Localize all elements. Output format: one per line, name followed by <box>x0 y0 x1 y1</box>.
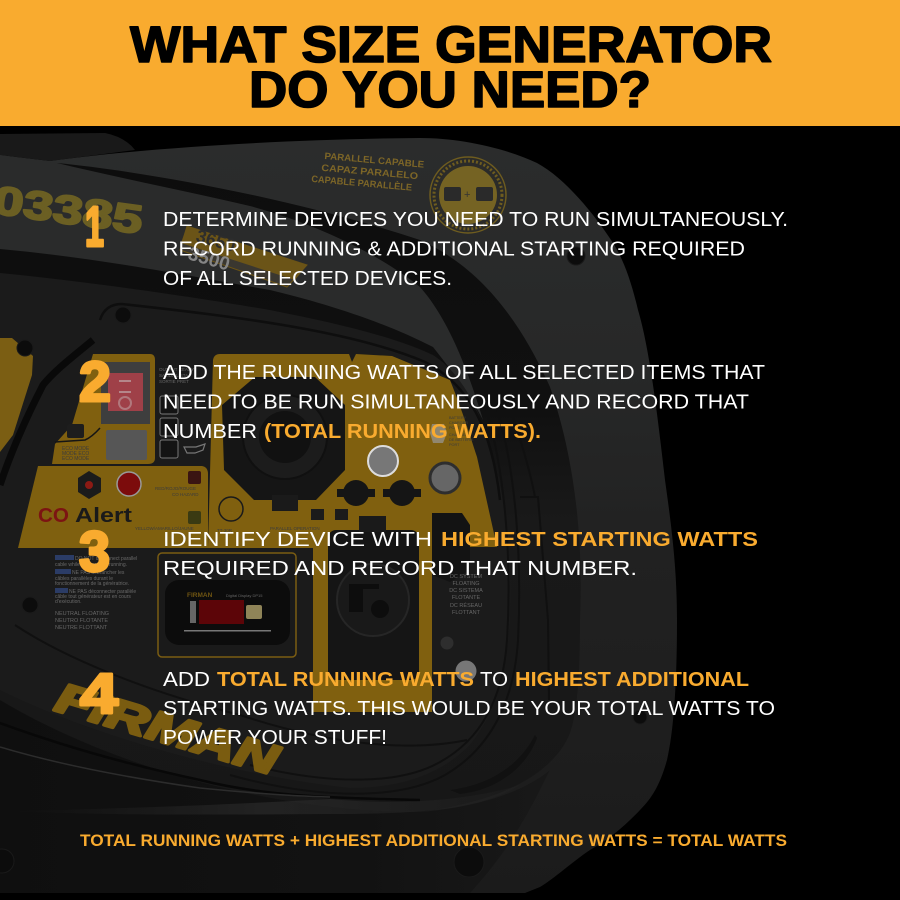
number 3: 3 <box>79 520 110 584</box>
parallel capable label: CAPAZ PARALELO <box>321 163 419 182</box>
step 4 <box>80 662 775 749</box>
DC floating labels: DC SYSTEM <box>450 574 482 580</box>
parallel capable label <box>311 150 425 195</box>
output ready label <box>159 367 194 384</box>
AC breaker button <box>368 446 398 476</box>
lower outlet <box>328 516 419 680</box>
control panel recess <box>0 273 510 788</box>
battery port labels: DE BATTERIE <box>449 438 474 442</box>
eco mode label: ECO MODE <box>62 456 90 462</box>
CO indicator lights: RED/ROJO/ROUGE <box>155 486 196 491</box>
neutral floating labels <box>55 611 109 631</box>
CO indicator lights: CO HAZARD <box>172 492 199 497</box>
lower crescent slot <box>450 735 537 794</box>
step 2 text: ADD THE RUNNING WATTS OF ALL SELECTED ITEMS THAT <box>163 362 765 384</box>
yellow panel: main outlets <box>208 354 497 712</box>
step 2 text: NEED TO BE RUN SIMULTANEOUSLY AND RECORD THAT <box>163 392 749 414</box>
eco mode label: ECO MODE <box>62 446 90 452</box>
step 2 text <box>163 362 765 443</box>
neutral floating labels: NEUTRE FLOTTANT <box>55 625 108 631</box>
switch panel separator <box>55 428 100 442</box>
battery bolt <box>430 424 447 443</box>
step 3 text: IDENTIFY DEVICE WITH <box>163 529 432 551</box>
notice small print: DO NOT disconnect parallel <box>75 556 137 562</box>
neutral floating labels: NEUTRO FLOTANTE <box>55 618 108 624</box>
step 1 text: RECORD RUNNING & ADDITIONAL STARTING REQUIRED <box>163 238 745 260</box>
panel top edge line <box>100 304 500 500</box>
top handle <box>0 133 135 161</box>
step 3 text: HIGHEST STARTING WATTS <box>441 528 758 551</box>
eco mode label: MODE ECO <box>62 451 89 457</box>
battery port labels <box>449 416 474 447</box>
light streak <box>15 785 520 815</box>
title band <box>0 0 900 126</box>
step 4 text: POWER YOUR STUFF! <box>163 727 387 749</box>
digital display <box>165 580 290 645</box>
step 3 <box>79 520 758 584</box>
battery port labels: CHARGEUR <box>449 433 471 437</box>
eco mode label <box>62 446 90 462</box>
red rocker switch <box>101 362 150 424</box>
parallel seal: + <box>464 189 470 201</box>
outlet labels: PARALLEL OPERATION <box>270 526 320 531</box>
number 2: 2 <box>79 350 111 414</box>
CO indicator lights: YELLOW/AMARILLO/JAUNE <box>135 526 194 531</box>
CO Alert wordmark: CO <box>38 505 69 527</box>
title: WHAT SIZE GENERATOR <box>130 16 772 73</box>
yellow panel: switch <box>52 354 155 464</box>
step 4 text: TO <box>480 669 508 691</box>
step 2 text: (TOTAL RUNNING WATTS). <box>264 420 541 443</box>
generator body <box>0 138 677 893</box>
lower body shade <box>0 700 550 893</box>
step 3 text <box>163 528 758 580</box>
CO indicator lights <box>135 471 201 531</box>
battery port labels: BATTERY <box>449 416 467 420</box>
bolts <box>0 247 647 877</box>
step 1 text <box>163 209 788 290</box>
notice small print: NE PAS débrancher les <box>72 570 125 576</box>
step 1 text: OF ALL SELECTED DEVICES. <box>163 268 452 290</box>
DC socket <box>432 513 470 582</box>
number 1: 1 <box>85 195 104 259</box>
step 2 <box>79 350 765 443</box>
side divider <box>0 340 93 485</box>
notice small print: NE PAS déconnecter parallèle <box>69 589 136 595</box>
step 4 text: STARTING WATTS. THIS WOULD BE YOUR TOTAL WATTS TO <box>163 698 775 720</box>
step 1 text: DETERMINE DEVICES YOU NEED TO RUN SIMULTANEOUSLY. <box>163 209 788 231</box>
notice small print: câble tout générateur est en cours <box>55 594 131 600</box>
parallel icons <box>311 509 348 520</box>
small outlet ring <box>219 497 243 521</box>
CO sensor icon <box>78 471 101 499</box>
DC breaker button <box>430 463 460 493</box>
step 4 text <box>163 668 775 749</box>
digital display frame <box>158 553 296 657</box>
DC floating labels <box>449 574 483 616</box>
grounding screw <box>456 660 476 682</box>
notice small print <box>55 555 137 605</box>
title <box>130 16 772 118</box>
gray eco switch <box>106 430 147 460</box>
digital display: Digital Display DP15 <box>226 593 263 598</box>
left yellow panel <box>0 338 33 452</box>
output ready label: SORTIE PRET <box>159 379 189 384</box>
notice small print: fonctionnement de la génératrice. <box>55 581 129 587</box>
right ring lines <box>15 400 549 794</box>
hex nut <box>440 636 454 650</box>
parallel ports <box>337 480 421 506</box>
neutral floating labels: NEUTRAL FLOATING <box>55 611 109 617</box>
parallel seal <box>430 157 506 233</box>
dark inner band <box>0 163 581 812</box>
battery port labels: PORT <box>449 443 460 447</box>
battery port labels: CHARGER <box>449 421 468 425</box>
wattage badge: 3650 <box>194 226 238 256</box>
output ready label: SALIDA LISTA <box>159 373 188 378</box>
digital display: FIRMAN <box>187 592 213 599</box>
notice small print: cable while generator is running. <box>55 562 127 568</box>
wattage badge <box>180 226 307 287</box>
red alert lamp <box>117 472 141 496</box>
CO Alert wordmark: Alert <box>75 505 132 527</box>
indicator column <box>160 396 178 458</box>
step 3 text: REQUIRED AND RECORD THAT NUMBER. <box>163 558 637 580</box>
step 4 text: TOTAL RUNNING WATTS <box>217 668 474 691</box>
large twist-lock outlet <box>222 377 345 511</box>
DC floating labels: FLOTANTE <box>452 595 480 601</box>
step 2 text: NUMBER <box>163 421 257 443</box>
parallel capable label: PARALLEL CAPABLE <box>324 151 425 171</box>
DC floating labels: FLOTTANT <box>452 610 481 616</box>
DC floating labels: DC RÉSEAU <box>450 602 482 609</box>
yellow panel: CO alert <box>18 466 208 548</box>
step 4 text: ADD <box>163 669 210 691</box>
FIRMAN logo: FIRMAN <box>50 674 286 784</box>
formula: TOTAL RUNNING WATTS + HIGHEST ADDITIONAL STARTING WATTS = TOTAL WATTS <box>80 831 787 850</box>
DC floating labels: FLOATING <box>452 581 480 587</box>
oil icon <box>184 444 205 453</box>
outlet labels <box>217 526 320 533</box>
parallel capable label: CAPABLE PARALLÈLE <box>311 174 412 194</box>
battery port labels: PORT <box>449 426 460 430</box>
wattage badge: 3500 <box>186 244 232 275</box>
lower panel light line <box>0 747 330 797</box>
engine icon <box>67 424 84 438</box>
output ready label: OUTPUT READY <box>159 367 194 372</box>
outlet labels: TT-30R <box>217 528 233 533</box>
lower cowl with model number <box>0 155 483 420</box>
step 1 <box>85 195 788 290</box>
notice small print: câbles parallèles durant le <box>55 576 113 582</box>
lower panel black sweep <box>0 723 420 800</box>
title: DO YOU NEED? <box>249 61 651 118</box>
DC floating labels: DC SISTEMA <box>449 588 483 594</box>
number 4: 4 <box>80 662 118 726</box>
step 4 text: HIGHEST ADDITIONAL <box>515 668 749 691</box>
CO Alert wordmark <box>38 505 132 527</box>
notice small print: d'exécution. <box>55 599 82 605</box>
